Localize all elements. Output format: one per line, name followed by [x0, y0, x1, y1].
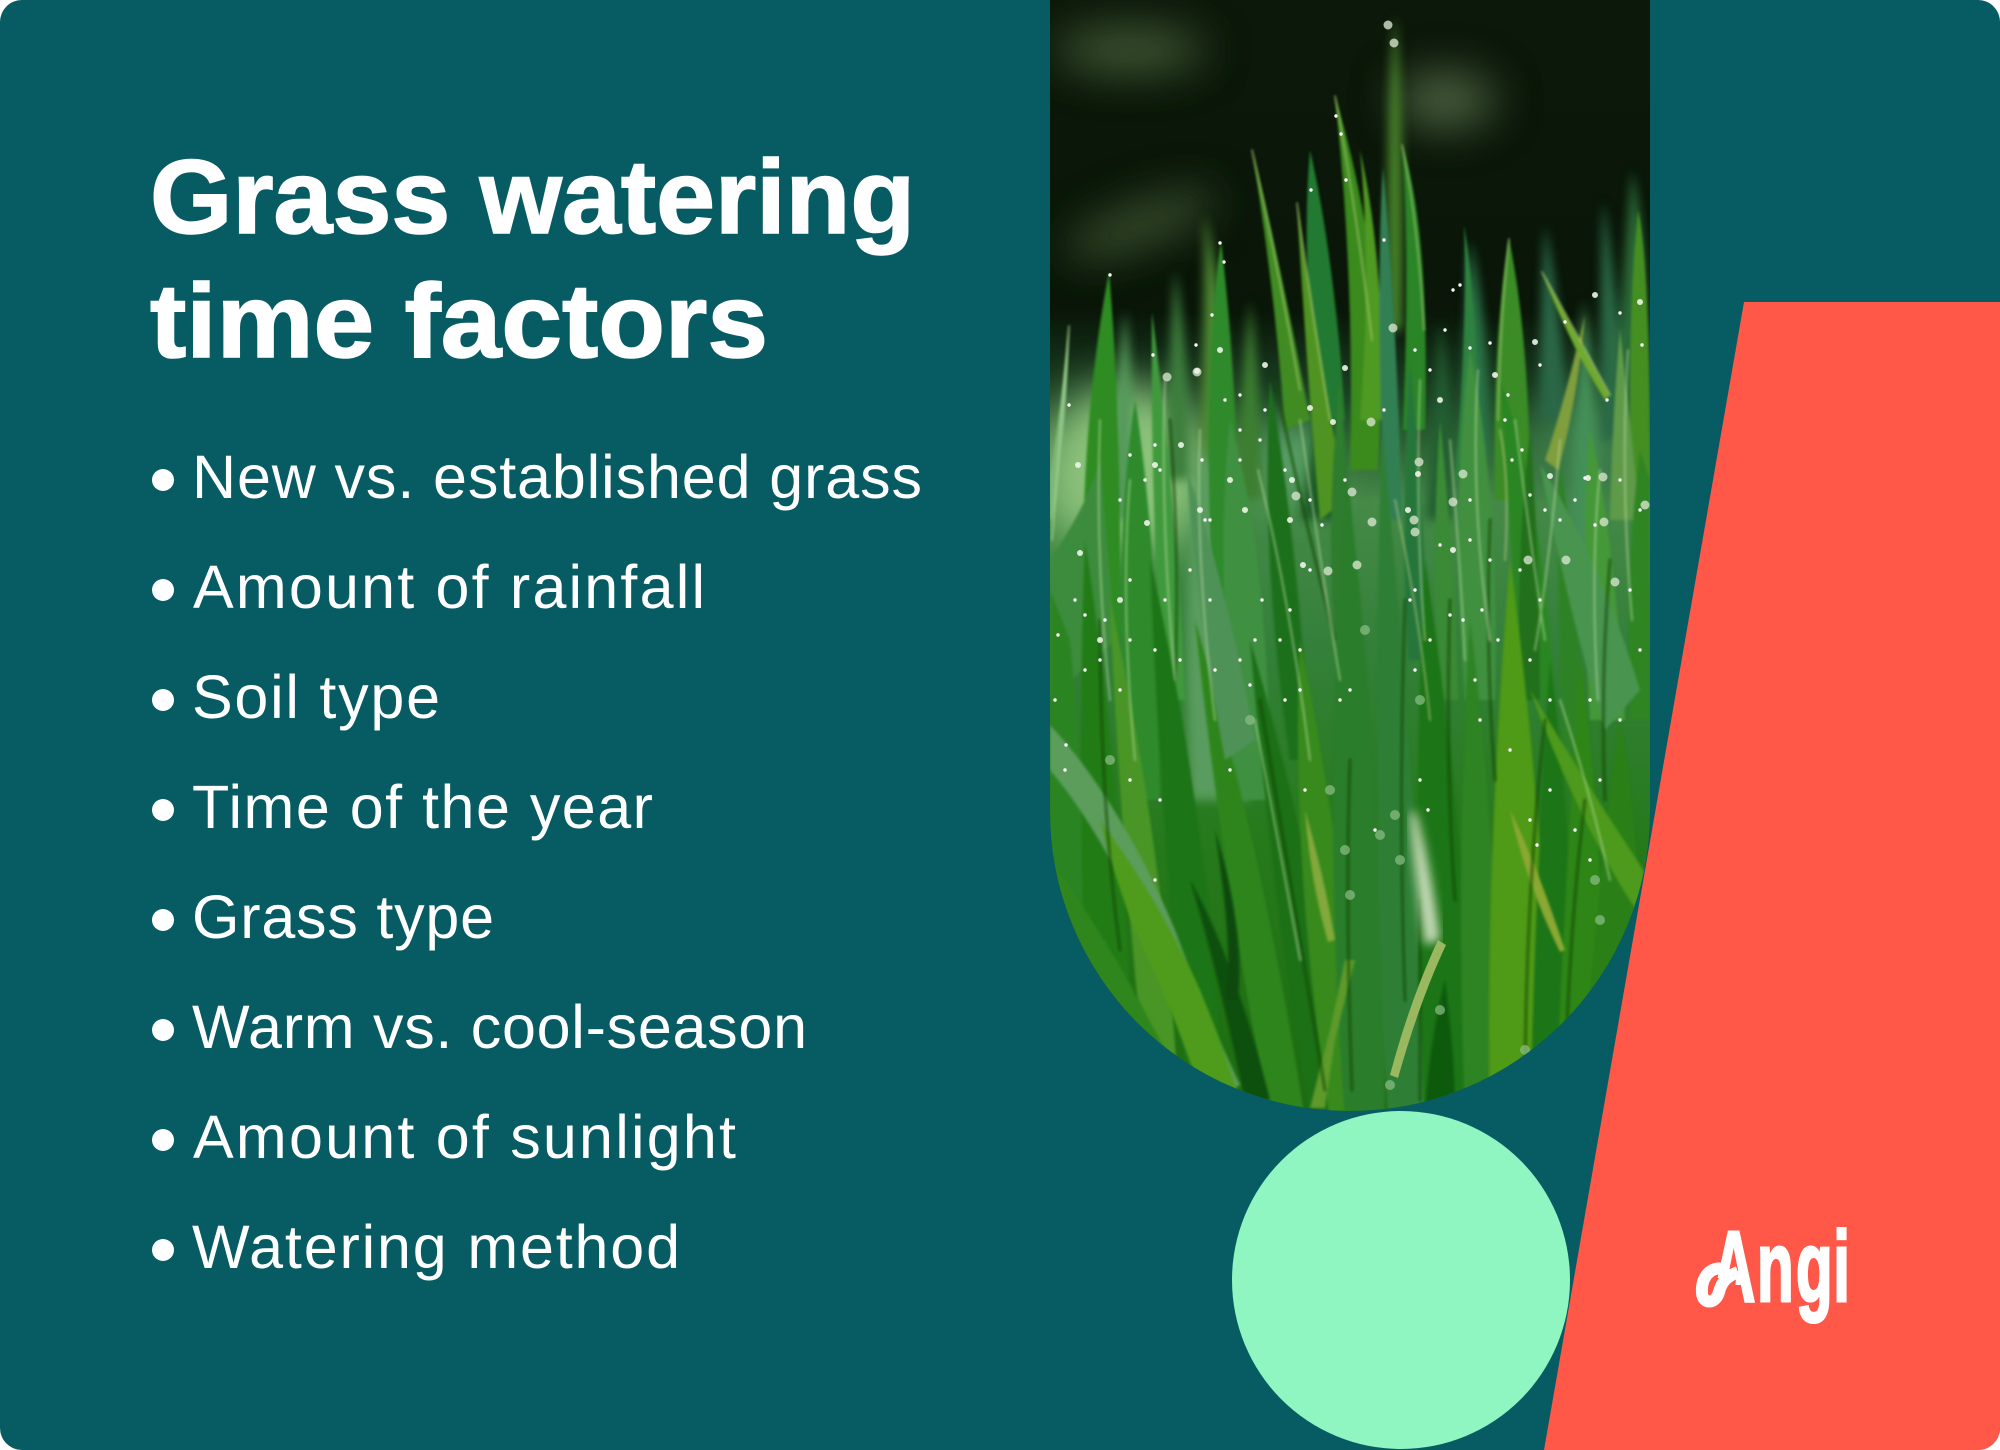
title: time factors [150, 263, 768, 380]
title [150, 156, 909, 359]
item [152, 1004, 804, 1048]
item: Warm vs. cool-season [192, 993, 807, 1061]
foreground blades [1050, 464, 1650, 1110]
logo: Angi: Angi [1712, 1211, 1850, 1323]
photo: grass with dew drops [1040, 0, 1650, 1120]
item: New vs. established grass [192, 443, 922, 511]
item: Watering method [192, 1213, 680, 1281]
bullet list: watering time factors [152, 443, 922, 1281]
coral panel [1544, 302, 2000, 1450]
title: Grass watering [150, 139, 915, 256]
mint circle [1232, 1111, 1570, 1449]
item: Grass type [192, 883, 494, 951]
item [152, 564, 701, 608]
blade masses [1050, 96, 1650, 800]
dew drops [1055, 25, 1645, 1085]
pale highlight [1410, 810, 1440, 945]
item: Amount of rainfall [193, 553, 705, 621]
item: Amount of sunlight [193, 1103, 736, 1171]
fine blade edges [1040, 0, 1632, 1100]
item: Time of the year [192, 773, 653, 841]
item: Soil type [192, 663, 440, 731]
